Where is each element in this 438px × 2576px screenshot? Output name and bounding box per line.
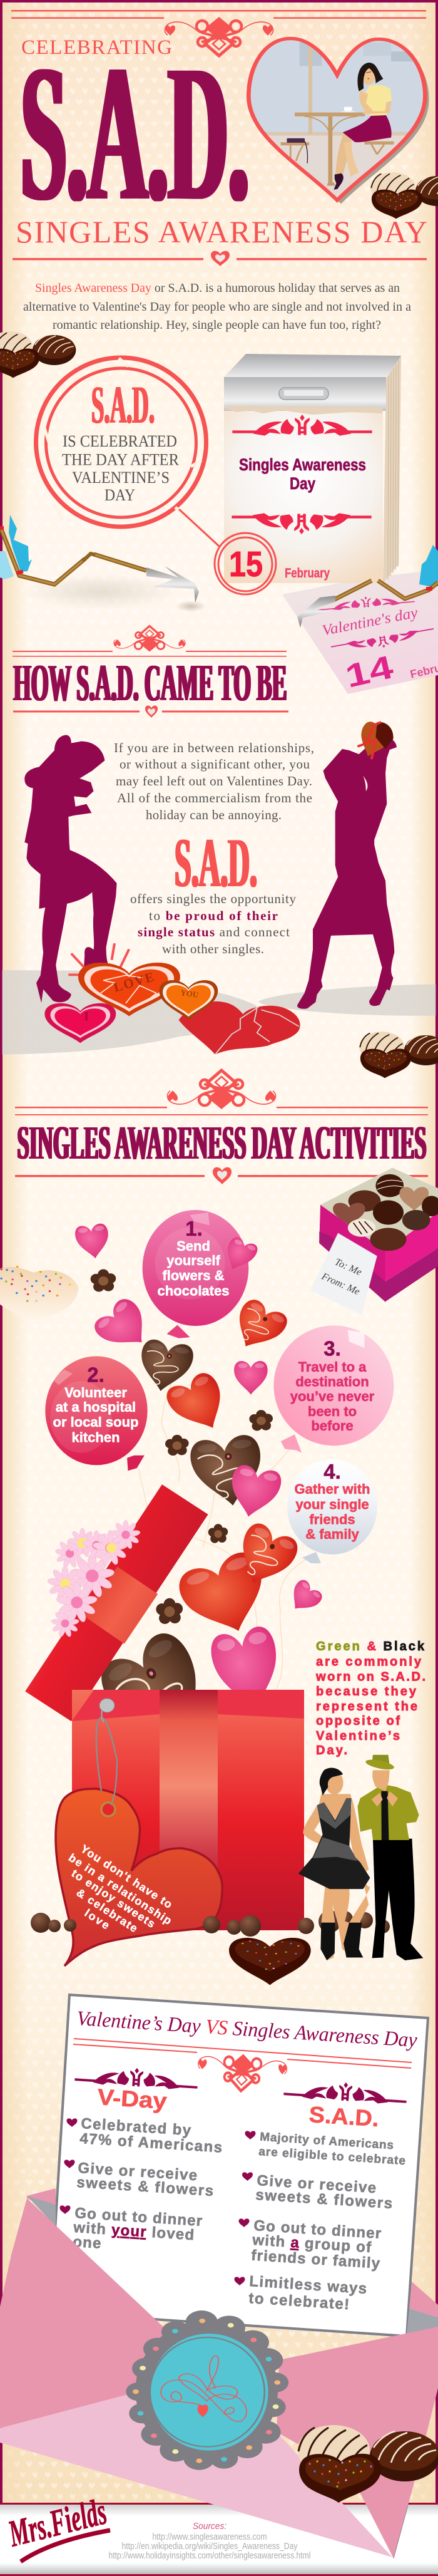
floating hearts upper group [74,1223,291,1521]
body text: in between relationships: holiday can be annoying. [146,807,282,822]
candy hearts and broken heart: YOU [180,988,200,1000]
sources: Sources: [193,2521,227,2532]
heading: celebrating: CELEBRATING [21,36,172,59]
green and black note: Green & Black [316,1640,425,1653]
balloon 4: gather: your single [295,1497,369,1512]
S.A.D. list: friends or family [251,2247,381,2272]
woman [298,1768,370,1960]
letter title: Valentine’s Day VS Singles Awareness Day [76,2007,418,2052]
S.A.D. list: to celebrate! [248,2290,350,2313]
chocolate balls row [31,1910,390,1937]
heart with woman at cafe table [246,36,429,204]
note text: To: Me [333,1256,363,1278]
balloon 3: travel: Travel to a [298,1359,367,1375]
S.A.D. list: with a group of [252,2232,372,2256]
green and black note: are commonly [316,1655,422,1668]
balloon 3: travel: you’ve never [290,1389,375,1404]
chocolates [370,172,438,219]
tear-off calendar [224,354,401,583]
intro paragraph: romantic relationship. Hey, single people can have fun too, right? [53,318,381,332]
body text: in between relationships: may feel left out on Valentines Day. [116,773,312,789]
footer band [0,2503,438,2576]
V-Day list: sweets & flowers [76,2174,214,2200]
V-Day list: Go out to dinner [74,2205,203,2230]
gift tag heart [56,1699,222,1966]
green and black note: represent the [316,1700,417,1714]
section ornament: activities [15,1070,428,1115]
divider with heart [13,251,427,266]
balloon 1: flowers and chocolates: 1. [185,1217,203,1240]
balloon 1: flowers and chocolates: Send [176,1238,210,1254]
candy hearts and broken heart [44,943,300,1055]
balloon 2: volunteer: Volunteer [64,1385,127,1400]
date stamp: 15: 15 [229,544,263,584]
tear-off calendar: February [285,566,330,581]
balloon strings [139,1353,316,1691]
balloon 2: volunteer: kitchen [71,1429,120,1446]
green and black note: Day. [316,1744,347,1757]
chocolates [359,1032,438,1078]
tear-off calendar: Day [290,474,315,493]
section ornament: how S.A.D. came to be [13,626,287,657]
green and black note: because they [316,1685,417,1699]
page: valentine's day calendar sheet: 14 [342,649,397,695]
sprinkled chocolate heart [229,1938,311,1985]
balloon 1: flowers and chocolates [143,1210,248,1338]
stamp: celebrated the day after: DAY [104,486,135,504]
stamp: celebrated the day after: THE DAY AFTER [62,451,180,468]
divider with heart [15,1167,428,1184]
body text: proud of their single status: offers singles the opportunity [130,891,297,906]
gift tag heart: & celebrate [74,1886,140,1935]
S.A.D. list: Go out to dinner [253,2217,382,2242]
green and black note: opposite of [316,1714,400,1728]
gift box [72,1690,304,1930]
green and black note [315,1640,425,1757]
balloon 3: travel [273,1325,394,1453]
comparison letter [50,1995,428,2336]
man [357,1755,423,1960]
silhouette: woman eating chocolate [297,720,397,1009]
V-Day list: Give or receive [78,2160,198,2184]
note text [319,1256,363,1297]
S.A.D. list: Limitless ways [249,2273,367,2297]
letter rules and ornament [73,2039,412,2105]
stamp: celebrated the day after: IS CELEBRATED [63,432,177,450]
V-Day list [59,2115,223,2252]
balloon 4: gather: 4. [323,1460,341,1483]
balloon 4: gather [287,1459,377,1563]
tear-off calendar: Singles Awareness [239,455,366,474]
balloon 1: flowers and chocolates: yourself [166,1253,220,1268]
heading: S.A.D.: S.A.D. [308,2101,380,2131]
divider with heart [13,706,288,718]
S.A.D. list: Majority of Americans [260,2131,394,2152]
S.A.D. list: sweets & flowers [255,2186,393,2212]
balloon 2: volunteer: 2. [87,1363,104,1387]
green and black note: Valentine’s [316,1729,400,1743]
header ornament with rules [11,10,426,56]
V-Day list: Celebrated by [81,2115,192,2139]
S.A.D. list: are eligible to celebrate [258,2145,406,2168]
gift tag heart: You don't have to [78,1843,175,1911]
S.A.D. list [234,2131,406,2313]
balloon 4: gather: friends [309,1512,355,1527]
balloon 2: volunteer: or local soup [53,1414,138,1430]
logo: Mrs. Fields [4,2490,110,2562]
candy hearts and broken heart: I [84,1010,89,1023]
chocolates [297,2425,438,2503]
stamp: celebrated the day after: VALENTINE’S [72,468,170,487]
sources [109,2521,310,2561]
logo: Mrs. Fields: Mrs.Fields [4,2490,110,2555]
balloon 1: flowers and chocolates: chocolates [158,1283,229,1299]
box of chocolates with note [310,1168,438,1315]
chocolates [0,331,76,378]
floor shadows [3,970,435,1055]
stamp: celebrated the day after: S.A.D. [91,375,155,435]
gift box lid with flowers [25,1484,208,1721]
heart chocolate box [354,720,395,761]
sources: http://www.holidayinsights.com/other/singlesawareness.html [109,2550,310,2561]
sprinkled cookie heart [0,1266,78,1320]
heading: V-Day: V-Day [96,2084,168,2114]
body text: proud of their single status: with other singles. [162,941,264,956]
intro paragraph [23,281,411,332]
candy hearts and broken heart: LOVE [112,969,156,995]
intro paragraph: alternative to Valentine's Day for people who are single and not involved in a [23,300,411,314]
V-Day list: one [73,2233,101,2252]
body text: in between relationships: or without a significant other, you [120,757,310,772]
balloon 4: gather: Gather with [294,1481,370,1497]
floating hearts lower group [93,1519,325,1766]
broken arrow right [297,545,438,628]
balloon 3: travel: destination [295,1374,369,1389]
green and black note: worn on S.A.D. [315,1670,425,1684]
body text: proud of their single status [130,891,297,956]
S.A.D. list: Give or receive [257,2172,377,2196]
body text: in between relationships: All of the commercialism from the [117,790,312,805]
intro paragraph: Singles Awareness Day or S.A.D. is a humorous holiday that serves as an [35,281,400,295]
balloon 3: travel: been to [308,1404,357,1419]
page: valentine's day calendar sheet [282,570,438,695]
sources: http://en.wikipedia.org/wiki/Singles_Awareness_Day [121,2541,298,2552]
body text: proud of their single status: single status and connect [138,924,290,939]
body text: proud of their single status: to be proud of their [149,908,278,923]
balloon 4: gather: & family [305,1526,360,1542]
V-Day list: with your loved [73,2219,195,2243]
balloon 1: flowers and chocolates: flowers & [162,1268,225,1283]
note text: From: Me [319,1271,361,1297]
balloon 2: volunteer [45,1356,148,1471]
page: valentine's day calendar sheet: Valentine's day [321,604,419,639]
silhouette: woman stomping candy heart [24,735,117,1003]
sources: http://www.singlesawareness.com [153,2532,267,2542]
stamp: celebrated the day after [36,358,219,546]
text: S.A.D. [175,824,257,902]
wax seal with flourish [126,2310,288,2470]
balloon 2: volunteer: at a hospital [56,1399,136,1415]
body text: in between relationships: If you are in between relationships, [114,740,314,755]
body text: in between relationships [114,740,314,822]
date stamp: 15 [215,533,276,594]
gift tag heart: to enjoy sweets [69,1867,158,1930]
couple in green and black [298,1755,423,1960]
balloon 3: travel: 3. [323,1337,341,1360]
gift tag heart: be in a relationship [66,1851,174,1927]
envelope [0,2188,438,2558]
V-Day list: 47% of Americans [79,2130,223,2156]
balloon 3: travel: before [311,1418,354,1434]
broken arrow left [0,515,206,612]
subtitle: SINGLES AWARENESS DAY [16,214,427,249]
gift tag heart: love [83,1906,112,1932]
